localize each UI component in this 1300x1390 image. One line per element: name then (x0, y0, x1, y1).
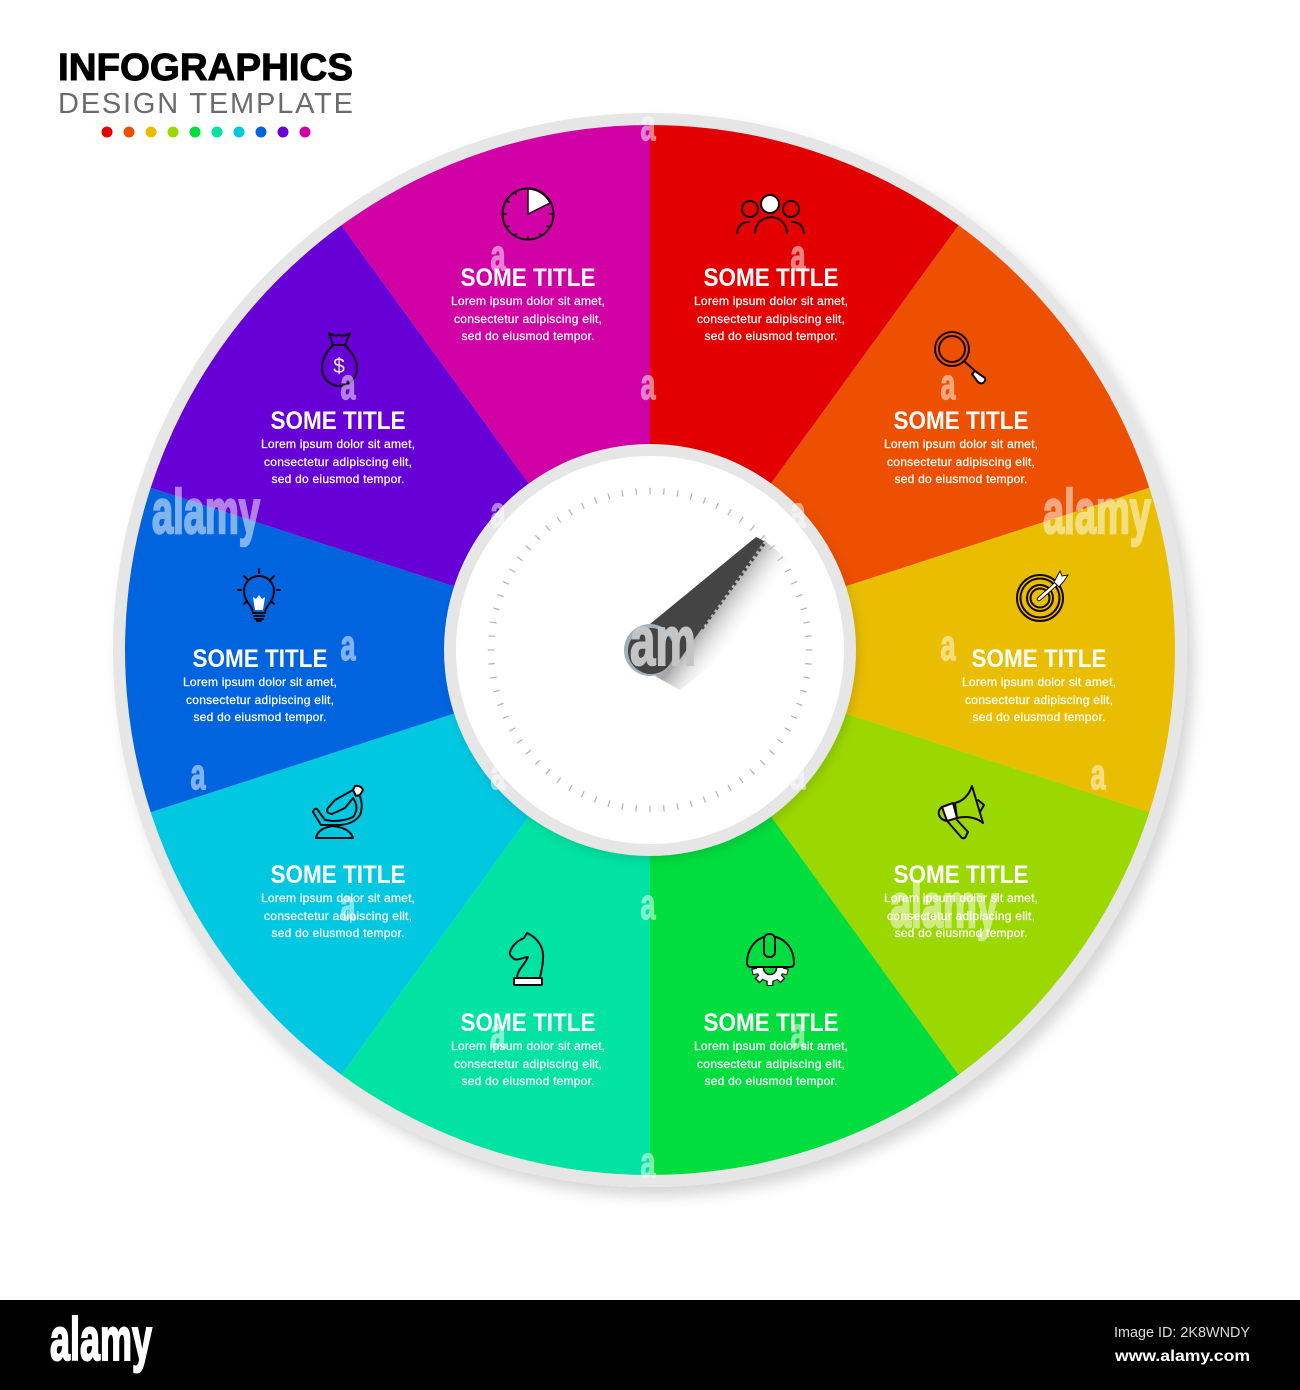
text: some title (884, 861, 1038, 940)
text: some title: SOME TITLE (270, 407, 406, 435)
text: some title: sed do eiusmod tempor. (972, 710, 1106, 724)
watermarks: alamy (152, 478, 260, 547)
text: some title: sed do eiusmod tempor. (272, 472, 404, 486)
text: some title: consectetur adipiscing elit, (887, 455, 1035, 469)
text: some title: SOME TITLE (894, 407, 1028, 435)
watermarks: a (790, 488, 806, 537)
text: some title: Lorem ipsum dolor sit amet, (884, 891, 1038, 905)
text: some title: Lorem ipsum dolor sit amet, (451, 1039, 605, 1053)
needle (624, 537, 764, 676)
panel: blue segment (125, 488, 650, 812)
icon: helmet with gear (747, 934, 794, 986)
gauge dial (444, 444, 856, 856)
watermarks: a (340, 621, 356, 670)
title (58, 47, 353, 138)
watermarks: a (490, 231, 506, 280)
watermarks: a (940, 360, 956, 409)
watermarks: alamy (1043, 478, 1151, 547)
watermarks: alamy (890, 872, 998, 941)
subheading: design template: DESIGN TEMPLATE (58, 88, 353, 120)
watermarks: a (1090, 750, 1106, 799)
text: some title: SOME TITLE (894, 861, 1028, 889)
heading: infographics: INFOGRAPHICS (58, 47, 353, 89)
panel: magenta segment (341, 125, 650, 650)
dial ticks (491, 491, 809, 809)
needle shadow (655, 540, 790, 690)
icon: microscope (313, 786, 363, 838)
text: some title: SOME TITLE (460, 1009, 596, 1037)
text: some title (261, 861, 415, 940)
text: some title (261, 407, 415, 486)
website: www.alamy.com (1114, 1348, 1250, 1365)
panel: cyan segment (151, 650, 650, 1075)
colour dots (102, 126, 310, 138)
watermarks (152, 101, 1151, 1187)
watermarks: a (790, 231, 806, 280)
dollar sign: $ (333, 355, 345, 378)
text: some title: consectetur adipiscing elit, (264, 455, 412, 469)
watermarks: a (190, 750, 206, 799)
text: some title: SOME TITLE (972, 645, 1106, 673)
text: some title (694, 264, 848, 343)
watermarks: a (790, 1009, 806, 1058)
panel: yellow segment (650, 488, 1175, 812)
icon: light bulb (238, 569, 280, 621)
text: some title: sed do eiusmod tempor. (894, 926, 1028, 940)
text: some title: Lorem ipsum dolor sit amet, (694, 294, 848, 308)
text: some title (962, 645, 1116, 724)
text: some title: consectetur adipiscing elit, (264, 909, 412, 923)
watermarks: a (640, 1138, 656, 1187)
watermarks: a (940, 621, 956, 670)
watermarks: a (640, 360, 656, 409)
text: some title: sed do eiusmod tempor. (462, 329, 594, 343)
text: some title: Lorem ipsum dolor sit amet, (694, 1039, 848, 1053)
text: some title: SOME TITLE (460, 264, 596, 292)
panel: green segment (650, 650, 959, 1175)
icon: magnifier (935, 332, 985, 383)
watermarks: a (640, 101, 656, 150)
text: some title (694, 1009, 848, 1088)
text: some title: Lorem ipsum dolor sit amet, (183, 675, 337, 689)
icon: money bag (322, 333, 357, 386)
text: some title: sed do eiusmod tempor. (194, 710, 326, 724)
watermarks: a (340, 881, 356, 930)
icon: people (737, 195, 804, 233)
watermarks: am (630, 602, 696, 680)
outer wheel ring (113, 113, 1187, 1187)
text: some title: sed do eiusmod tempor. (704, 1074, 838, 1088)
text: some title: Lorem ipsum dolor sit amet, (962, 675, 1116, 689)
text: some title: consectetur adipiscing elit, (965, 693, 1113, 707)
text: some title: SOME TITLE (192, 645, 328, 673)
panel: purple segment (151, 225, 650, 650)
icon: megaphone (939, 786, 984, 838)
text: some title: consectetur adipiscing elit, (887, 909, 1035, 923)
text: some title: consectetur adipiscing elit, (697, 1057, 845, 1071)
text: some title: sed do eiusmod tempor. (704, 329, 838, 343)
footer logo: alamy (50, 1306, 152, 1373)
text: some title: consectetur adipiscing elit, (454, 312, 602, 326)
text: some title: Lorem ipsum dolor sit amet, (261, 891, 415, 905)
text: some title: Lorem ipsum dolor sit amet, (884, 437, 1038, 451)
watermarks: a (490, 750, 506, 799)
text: some title: consectetur adipiscing elit, (186, 693, 334, 707)
text: some title: sed do eiusmod tempor. (462, 1074, 594, 1088)
image id: Image ID: 2K8WNDY (1114, 1324, 1250, 1341)
text: some title: SOME TITLE (270, 861, 406, 889)
icon: clock (502, 188, 554, 240)
text: some title: sed do eiusmod tempor. (272, 926, 404, 940)
text: some title: SOME TITLE (704, 1009, 838, 1037)
text: some title (183, 645, 337, 724)
watermarks: a (490, 488, 506, 537)
panel: orange segment (650, 225, 1149, 650)
text: some title: Lorem ipsum dolor sit amet, (261, 437, 415, 451)
icon: target with arrow (1017, 571, 1068, 621)
panel: lime segment (650, 650, 1149, 1075)
text: some title: SOME TITLE (704, 264, 838, 292)
text: some title (884, 407, 1038, 486)
text: some title (451, 1009, 605, 1088)
watermarks: a (490, 1009, 506, 1058)
watermarks: a (790, 750, 806, 799)
watermarks: a (640, 880, 656, 929)
text: some title: sed do eiusmod tempor. (894, 472, 1028, 486)
text: some title: Lorem ipsum dolor sit amet, (451, 294, 605, 308)
watermarks: a (340, 360, 356, 409)
text: some title: consectetur adipiscing elit, (697, 312, 845, 326)
icon: chess knight (510, 933, 543, 985)
panel: teal segment (341, 650, 650, 1175)
text: some title (451, 264, 605, 343)
text: some title: consectetur adipiscing elit, (454, 1057, 602, 1071)
footer bar (0, 1300, 1300, 1390)
panel: red segment (650, 125, 959, 650)
